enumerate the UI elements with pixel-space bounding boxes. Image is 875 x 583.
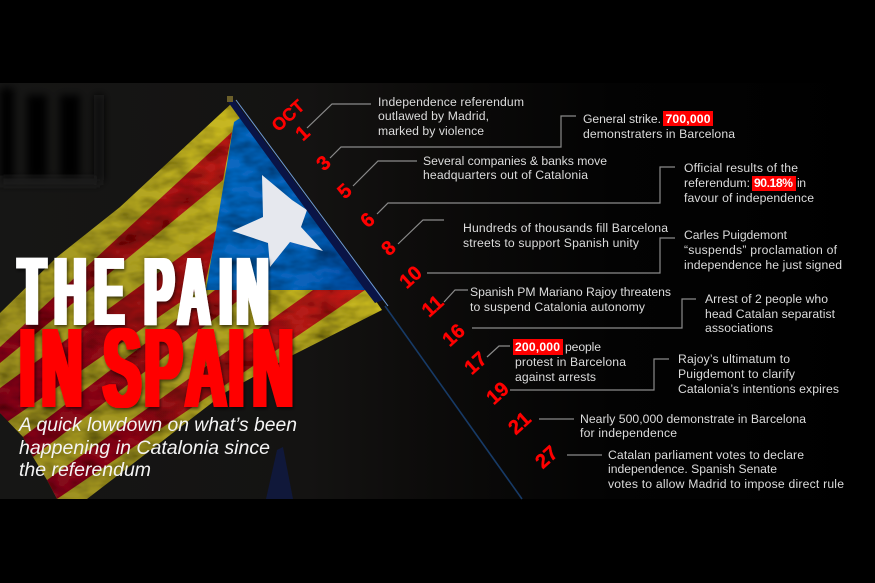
- highlight: 200,000: [513, 339, 563, 355]
- event: Oct 6: in: [797, 176, 806, 190]
- event: Oct 1: [291, 95, 524, 145]
- event: Oct 27: votes to allow Madrid to impose direct rule: [608, 477, 844, 491]
- month label: Oct: OCT: [268, 96, 309, 135]
- event: Oct 11: Spanish PM Mariano Rajoy threatens: [470, 285, 671, 299]
- small background flag: [266, 447, 293, 499]
- event: Oct 3: General strike.: [583, 112, 661, 126]
- flag body with stripes: [0, 100, 400, 500]
- event: Oct 16: associations: [705, 321, 773, 335]
- event: Oct 17: 200,000: [515, 340, 560, 354]
- event: Oct 19: Catalonia’s intentions expires: [678, 382, 839, 396]
- event: Oct 17: [460, 339, 626, 384]
- event: Oct 6: Official results of the: [684, 161, 798, 175]
- event: Oct 27: 27: [531, 442, 563, 473]
- highlight: 700,000: [663, 111, 713, 126]
- event: Oct 19: 19: [482, 378, 514, 409]
- event: Oct 3: 700,000: [666, 112, 711, 126]
- event: Oct 21: [504, 408, 806, 440]
- event: Oct 5: [333, 154, 607, 203]
- event: Oct 17: people: [565, 340, 601, 354]
- event: Oct 16: Arrest of 2 people who: [705, 292, 828, 306]
- event: Oct 19: Puigdemont to clarify: [678, 367, 796, 381]
- event: Oct 5: headquarters out of Catalonia: [423, 168, 588, 182]
- subtitle: [18, 414, 297, 481]
- flagpole: [385, 306, 522, 499]
- event: Oct 11: [418, 285, 671, 322]
- subtitle: happening in Catalonia since: [19, 437, 270, 459]
- event: Oct 10: independence he just signed: [684, 258, 842, 272]
- event: Oct 21: 21: [504, 408, 536, 439]
- subtitle: A quick lowdown on what’s been: [18, 414, 297, 436]
- event: Oct 1: Independence referendum: [378, 95, 524, 109]
- event: Oct 6: favour of independence: [684, 191, 814, 205]
- event: Oct 16: 16: [438, 320, 470, 351]
- event: Oct 5: Several companies & banks move: [423, 154, 607, 168]
- pole tip: [227, 96, 233, 102]
- event: Oct 8: streets to support Spanish unity: [463, 236, 640, 250]
- white star: [232, 175, 323, 267]
- event: Oct 16: [438, 292, 836, 351]
- event: Oct 21: Nearly 500,000 demonstrate in Barcelona: [580, 412, 806, 426]
- event: Oct 19: Rajoy’s ultimatum to: [678, 352, 790, 366]
- title line: in spain: IN SPAIN: [20, 305, 293, 431]
- event: Oct 27: [531, 442, 844, 491]
- event: Oct 3: 3: [312, 152, 335, 175]
- event: Oct 10: [395, 228, 842, 293]
- event: Oct 11: to suspend Catalonia autonomy: [470, 300, 646, 314]
- event: Oct 11: 11: [418, 291, 448, 322]
- event: Oct 1: marked by violence: [378, 124, 484, 138]
- flagpole edge band: [228, 100, 383, 303]
- event: Oct 27: Catalan parliament votes to declare: [608, 448, 804, 462]
- event: Oct 19: [482, 352, 839, 409]
- background photo: [0, 83, 875, 499]
- event: Oct 17: against arrests: [515, 370, 596, 384]
- title line: the pain: THE PAIN: [19, 237, 268, 346]
- event: Oct 17: 17: [460, 348, 492, 379]
- event: Oct 10: Carles Puigdemont: [684, 228, 788, 242]
- event: Oct 17: protest in Barcelona: [515, 355, 626, 369]
- event: Oct 3: demonstraters in Barcelona: [583, 127, 735, 141]
- event: Oct 10: “suspends” proclamation of: [684, 243, 838, 257]
- highlight: 90.18%: [752, 176, 796, 191]
- event: Oct 3: [312, 111, 735, 175]
- event: Oct 21: for independence: [580, 426, 677, 440]
- event: Oct 8: Hundreds of thousands fill Barcelona: [463, 221, 668, 235]
- event: Oct 16: head Catalan separatist: [705, 307, 836, 321]
- event: Oct 6: [356, 161, 814, 232]
- event: Oct 1: outlawed by Madrid,: [378, 109, 489, 123]
- title: [19, 237, 293, 431]
- event: Oct 1: 1: [291, 122, 314, 145]
- event: Oct 8: 8: [377, 237, 400, 260]
- event: Oct 10: 10: [395, 262, 427, 293]
- subtitle: the referendum: [19, 459, 151, 481]
- blue triangle: [206, 118, 375, 290]
- event: Oct 6: 90.18%: [754, 176, 793, 190]
- event: Oct 8: [377, 220, 668, 260]
- event: Oct 6: referendum:: [684, 176, 750, 190]
- event: Oct 5: 5: [333, 180, 356, 203]
- event: Oct 27: independence. Spanish Senate: [608, 462, 777, 476]
- Catalan flag: [0, 96, 522, 500]
- event: Oct 6: 6: [356, 209, 379, 232]
